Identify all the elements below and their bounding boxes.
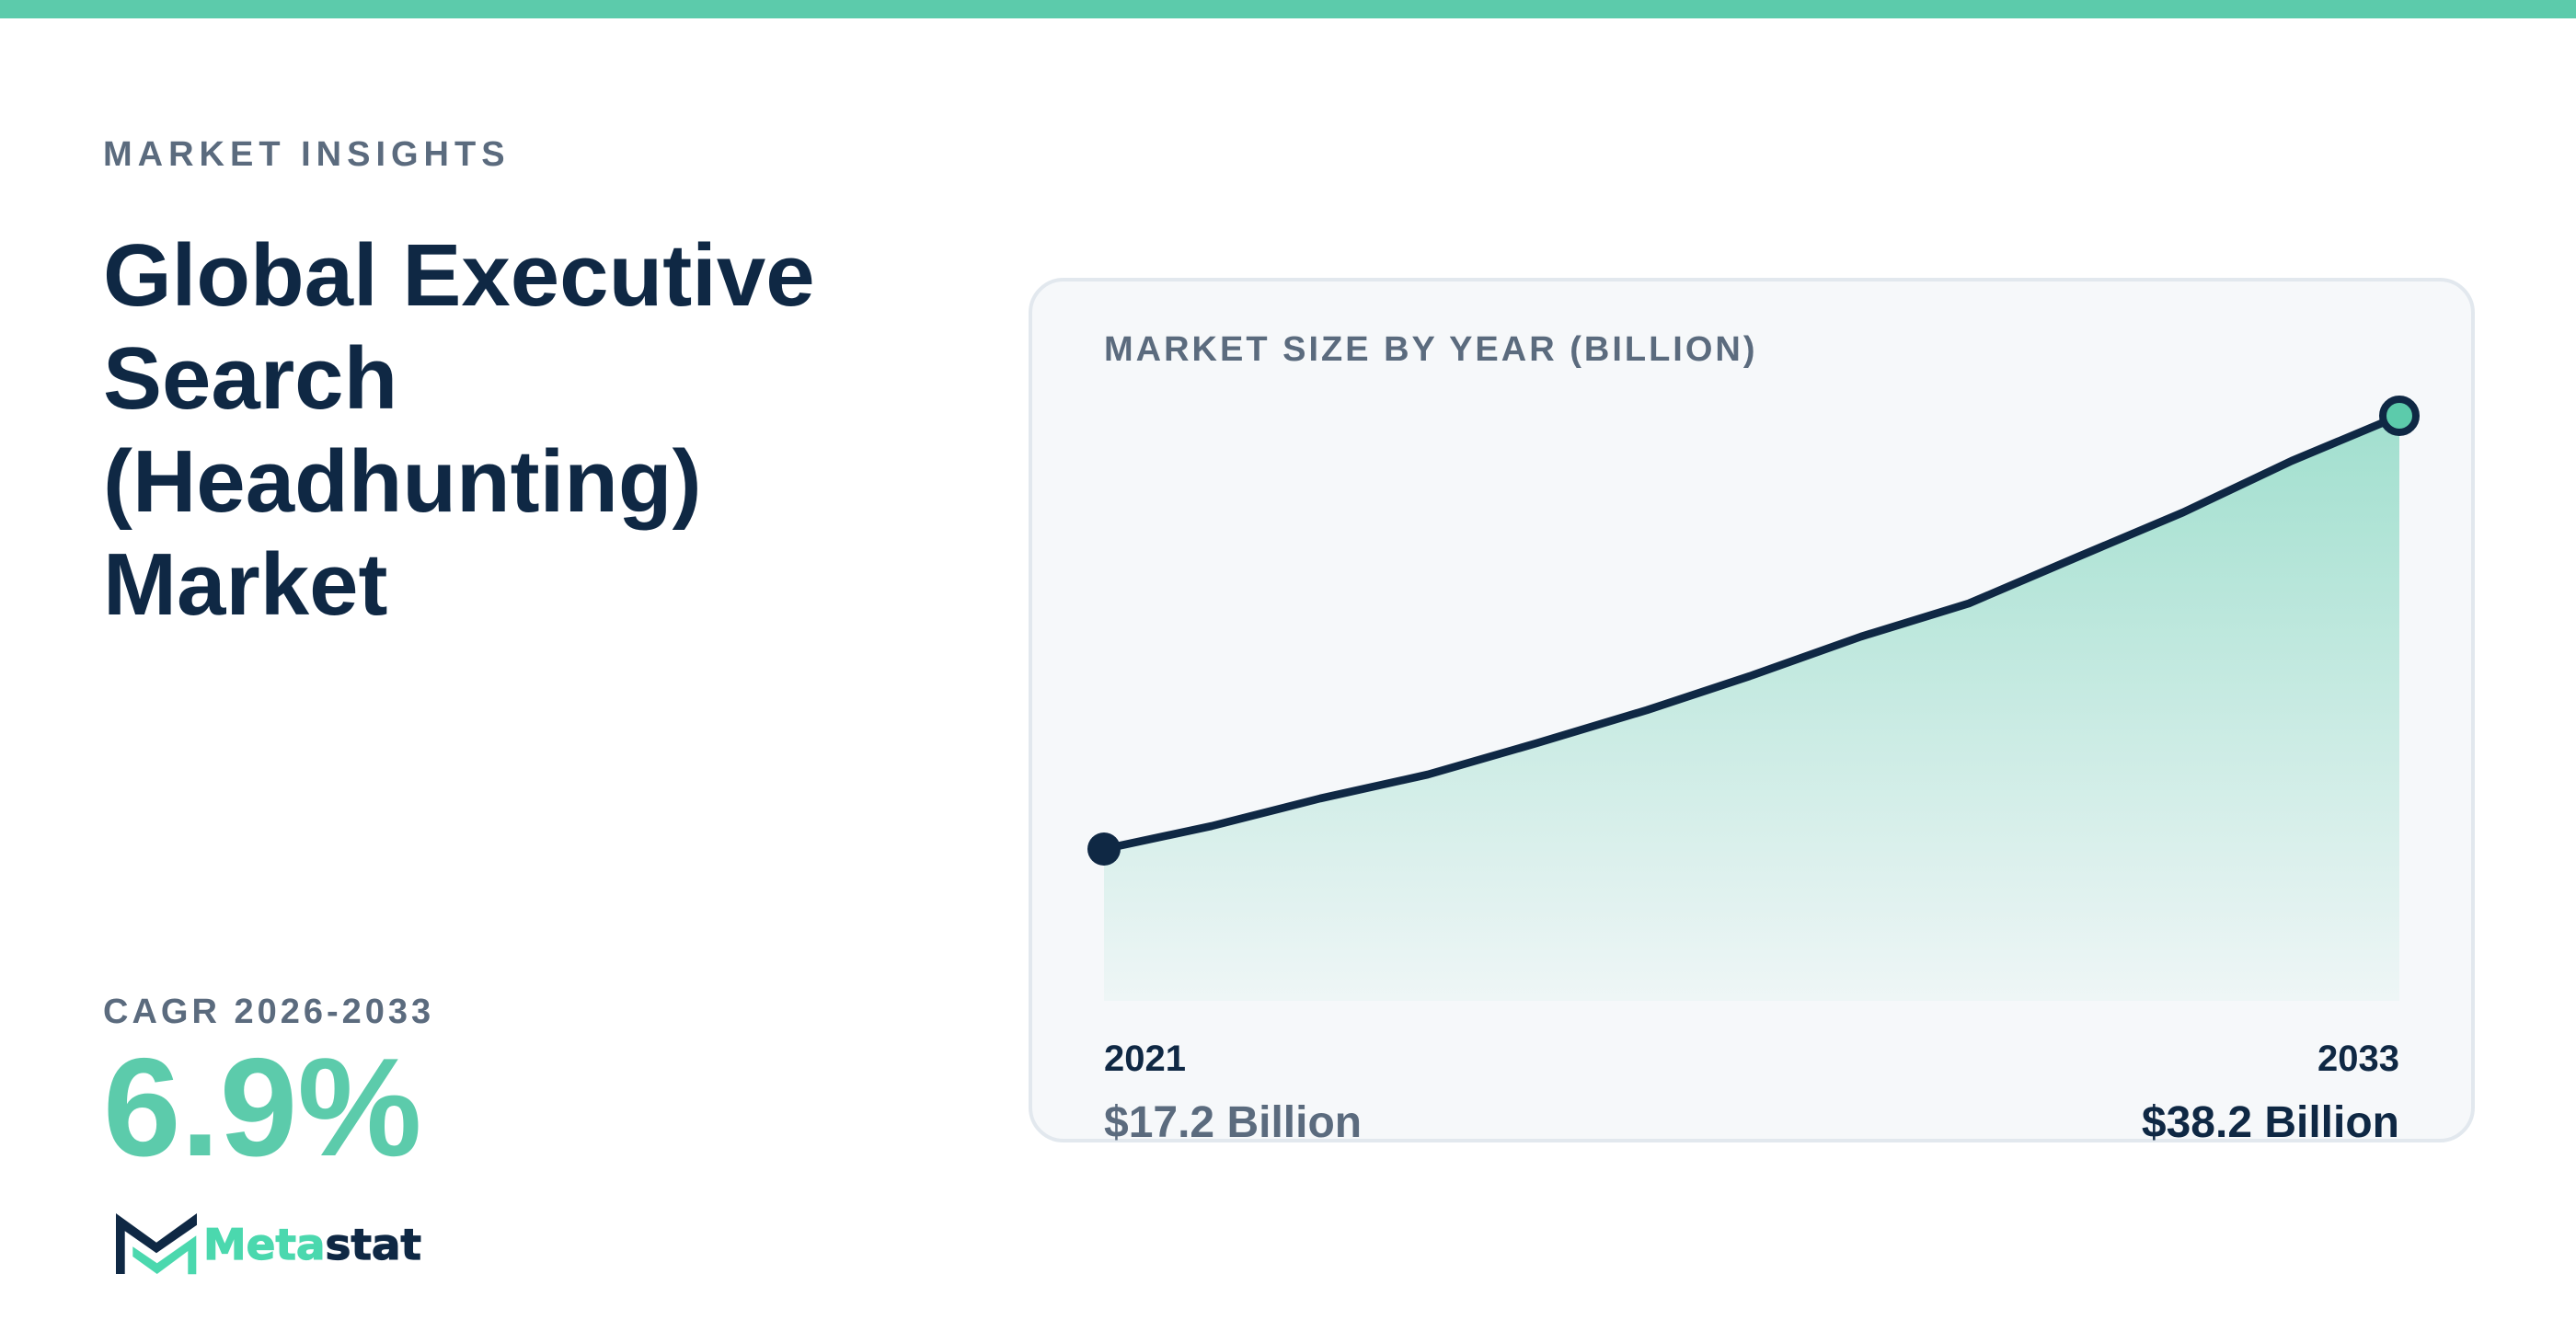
end value: $38.2 Billion bbox=[2142, 1098, 2399, 1147]
end point bbox=[2383, 399, 2416, 432]
logo wordmark: Metastat bbox=[203, 1220, 421, 1269]
start value: $17.2 Billion bbox=[1104, 1098, 1362, 1147]
area line chart bbox=[1087, 396, 2420, 997]
title: Market bbox=[103, 535, 387, 634]
end year label: 2033 bbox=[2317, 1039, 2399, 1079]
trend line bbox=[1104, 416, 2399, 849]
eyebrow label: MARKET INSIGHTS bbox=[103, 135, 511, 174]
chart heading: MARKET SIZE BY YEAR (BILLION) bbox=[1104, 330, 1758, 369]
CAGR label: CAGR 2026-2033 bbox=[103, 993, 434, 1031]
top accent bar bbox=[0, 0, 2576, 18]
start year label: 2021 bbox=[1104, 1039, 1186, 1079]
title: Search bbox=[103, 329, 397, 428]
title bbox=[103, 226, 815, 634]
area fill bbox=[1104, 416, 2399, 1001]
logo bbox=[116, 1213, 421, 1275]
logo mark bbox=[116, 1213, 197, 1274]
title: Global Executive bbox=[103, 226, 815, 325]
CAGR value: 6.9% bbox=[103, 1029, 421, 1186]
title: (Headhunting) bbox=[103, 432, 702, 531]
panel: market size chart card bbox=[1029, 278, 2475, 1142]
start point bbox=[1087, 832, 1121, 866]
